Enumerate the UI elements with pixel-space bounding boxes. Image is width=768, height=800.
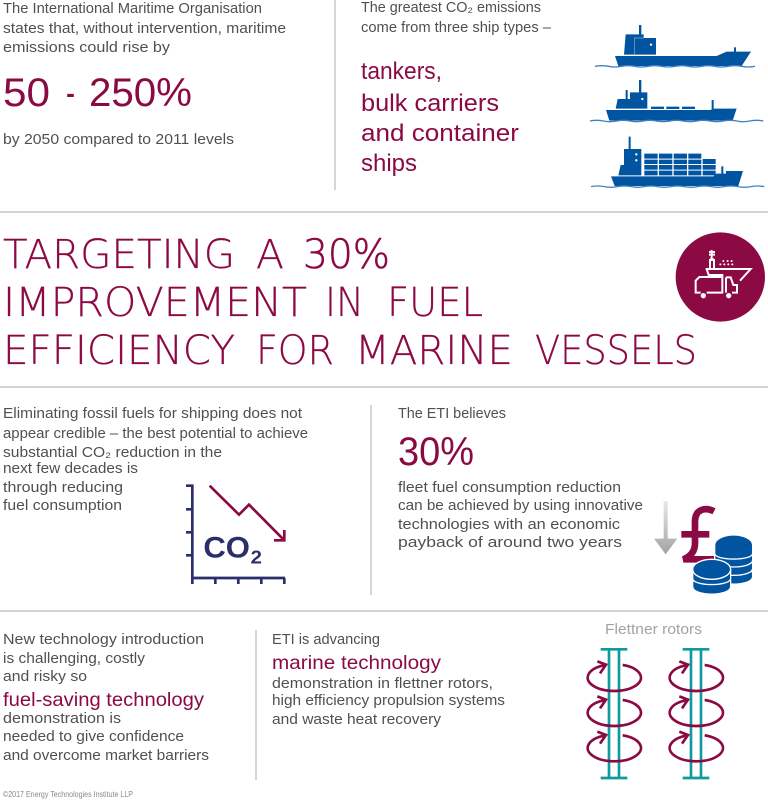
text block: ETI 30 percent	[398, 406, 643, 551]
icon: coin stacks	[693, 535, 753, 594]
icon: CO2 falling chart: 2	[251, 546, 262, 567]
title: FOR	[256, 328, 334, 374]
text block: maritime emissions forecast: The International Maritime Organisation	[3, 1, 262, 17]
text block: fuel-saving technology: and overcome market barriers	[3, 748, 209, 764]
text block: fuel-saving technology: and risky so	[3, 669, 87, 685]
text block: fuel-saving technology: demonstration is	[3, 711, 121, 727]
text block: fuel consumption: substantial CO₂ reduction in the	[3, 445, 222, 461]
text block: ETI 30 percent: payback of around two years	[398, 535, 622, 551]
title: TARGETING	[3, 232, 235, 278]
text block: fuel consumption: fuel consumption	[3, 498, 122, 514]
text block: maritime emissions forecast: emissions could rise by	[3, 40, 171, 56]
text block: fuel-saving technology: is challenging, costly	[3, 651, 146, 667]
text block: fuel consumption: appear credible – the best potential to achieve	[3, 426, 308, 442]
icon: Flettner rotors	[588, 649, 723, 778]
title: IN	[325, 280, 364, 326]
text block: marine technology: and waste heat recovery	[272, 712, 442, 728]
text block: fuel-saving technology	[3, 632, 209, 764]
icon: CO2 falling chart	[186, 486, 285, 584]
text block: maritime emissions forecast: by 2050 compared to 2011 levels	[3, 132, 234, 148]
text block: fuel consumption: through reducing	[3, 480, 123, 496]
text block: fuel-saving technology: needed to give confidence	[3, 729, 184, 745]
text block: marine technology: ETI is advancing	[272, 632, 380, 648]
footer copyright: ©2017 Energy Technologies Institute LLP	[3, 789, 133, 799]
text block: ETI 30 percent: technologies with an economic	[398, 517, 620, 533]
text block: fuel consumption: Eliminating fossil fuels for shipping does not	[3, 406, 302, 422]
text block: ship types: The greatest CO₂ emissions	[361, 0, 541, 16]
text block: ship types: ships	[361, 150, 417, 177]
text block: ship types: bulk carriers	[361, 90, 499, 117]
icon: pound, coins and down arrow	[654, 501, 753, 594]
title: A	[256, 232, 284, 278]
text block: fuel-saving technology: fuel-saving technology	[3, 689, 204, 711]
text block: maritime emissions forecast	[3, 1, 286, 148]
text block: maritime emissions forecast: -	[66, 71, 75, 115]
text block: ship types: come from three ship types –	[361, 20, 552, 36]
text block: marine technology: high efficiency propulsion systems	[272, 693, 505, 709]
title: IMPROVEMENT	[3, 280, 307, 326]
icon: ship and truck badge	[676, 232, 765, 322]
text block: ETI 30 percent: fleet fuel consumption reduction	[398, 480, 621, 496]
text block: ship types: tankers,	[361, 58, 442, 85]
icon: container ship	[591, 137, 764, 187]
title: VESSELS	[535, 328, 697, 374]
text block: ETI 30 percent: can be achieved by using innovative	[398, 498, 643, 514]
icon: CO2 falling chart: CO	[203, 531, 250, 564]
text block: marine technology	[272, 632, 505, 728]
icon: pound sign	[681, 509, 716, 559]
text block: ETI 30 percent: The ETI believes	[398, 406, 506, 422]
text block: marine technology: demonstration in flettner rotors,	[272, 676, 493, 692]
icons: three ships	[590, 25, 764, 187]
title: MARINE	[355, 328, 513, 374]
text block: fuel-saving technology: New technology introduction	[3, 632, 204, 648]
text block: maritime emissions forecast: 250%	[89, 71, 192, 115]
text block: maritime emissions forecast: states that, without intervention, maritime	[3, 21, 286, 37]
icon: tanker	[595, 25, 755, 67]
icon: grey down arrow	[654, 501, 677, 554]
title	[3, 232, 697, 374]
icon: bulk carrier	[590, 80, 763, 122]
label: Flettner rotors: Flettner rotors	[605, 622, 702, 638]
text block: maritime emissions forecast: 50	[3, 71, 50, 115]
text block: ship types	[361, 0, 552, 177]
title: FUEL	[387, 280, 483, 326]
text block: fuel consumption	[3, 406, 308, 514]
title: EFFICIENCY	[3, 328, 235, 374]
text block: fuel consumption: next few decades is	[3, 461, 138, 477]
text block: marine technology: marine technology	[272, 652, 441, 674]
title: 30%	[303, 232, 390, 278]
text block: ETI 30 percent: 30%	[398, 430, 474, 474]
text block: ship types: and container	[361, 120, 519, 147]
